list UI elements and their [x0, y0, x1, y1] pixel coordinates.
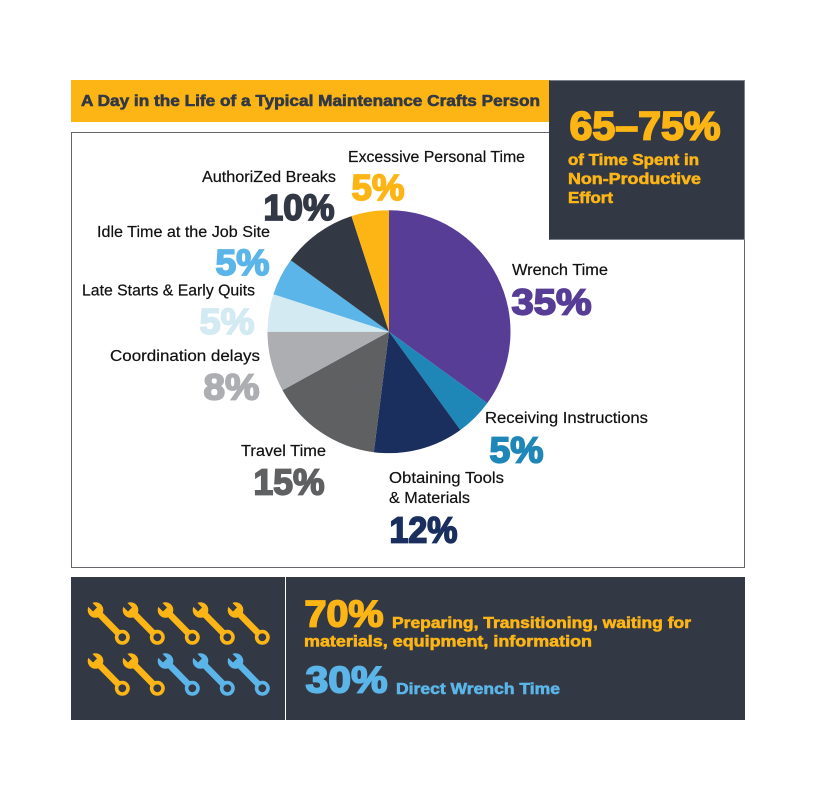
- label: authorized breaks: AuthoriZed Breaks: [202, 169, 336, 186]
- stat: 30 percent: 30%: [306, 660, 388, 700]
- label: wrench time: 35%: [512, 282, 592, 322]
- label: coordination delays: Coordination delays: [110, 348, 260, 365]
- callout: non-productive effort: of Time Spent in: [568, 152, 699, 169]
- label: receiving instructions: Receiving Instructions: [485, 410, 648, 427]
- label: authorized breaks: [202, 169, 336, 228]
- stat: 70 percent: [304, 594, 691, 650]
- callout: non-productive effort: [549, 80, 745, 240]
- label: obtaining tools: [389, 470, 504, 550]
- label: obtaining tools: & Materials: [389, 490, 470, 507]
- label: travel time: Travel Time: [241, 443, 326, 460]
- label: coordination delays: [110, 348, 260, 408]
- heading banner: [71, 80, 549, 122]
- icon: wrench row 2: [84, 650, 270, 696]
- callout: non-productive effort: 65–75%: [570, 104, 720, 148]
- stat: 70 percent: Preparing, Transitioning, waiting for: [392, 615, 691, 632]
- label: wrench time: Wrench Time: [512, 262, 608, 279]
- stat: 30 percent: Direct Wrench Time: [396, 681, 560, 698]
- callout: non-productive effort: Effort: [568, 190, 614, 207]
- label: receiving instructions: 5%: [490, 430, 544, 470]
- label: travel time: 15%: [254, 462, 324, 502]
- label: obtaining tools: Obtaining Tools: [389, 470, 504, 487]
- heading banner: A Day in the Life of a Typical Maintenance Crafts Person: [81, 93, 540, 110]
- label: obtaining tools: 12%: [390, 510, 458, 550]
- panel: wrench icons: [71, 577, 285, 720]
- label: idle time: Idle Time at the Job Site: [97, 224, 270, 241]
- label: excessive personal time: 5%: [352, 167, 404, 208]
- pie chart: [267, 210, 510, 453]
- label: receiving instructions: [485, 410, 648, 470]
- label: coordination delays: 8%: [204, 366, 260, 408]
- label: travel time: [241, 443, 326, 502]
- panel: chart frame: [72, 132, 744, 568]
- panel: wrench time summary: [286, 577, 745, 720]
- icon: wrench row 1: [84, 598, 270, 645]
- stat: 70 percent: 70%: [304, 594, 384, 634]
- label: authorized breaks: 10%: [264, 187, 334, 228]
- label: excessive personal time: [348, 149, 525, 208]
- label: late starts: Late Starts & Early Quits: [82, 282, 255, 300]
- label: wrench time: [512, 262, 608, 322]
- label: late starts: 5%: [200, 301, 254, 342]
- callout: non-productive effort: Non-Productive: [568, 171, 701, 188]
- stat: 70 percent: materials, equipment, information: [304, 634, 592, 650]
- label: idle time: 5%: [216, 242, 270, 283]
- label: late starts: [82, 282, 255, 342]
- stat: 30 percent: [306, 660, 560, 700]
- label: excessive personal time: Excessive Personal Time: [348, 149, 525, 166]
- label: idle time: [97, 224, 270, 283]
